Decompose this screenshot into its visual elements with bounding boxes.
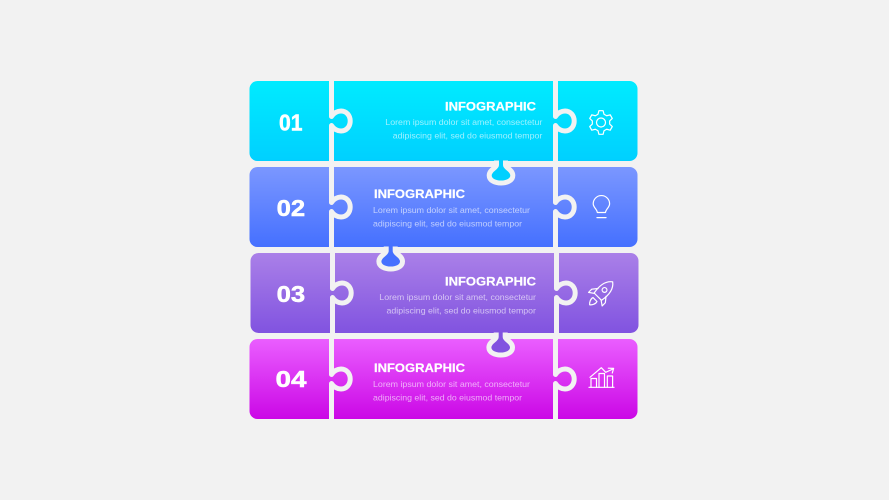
row 02 body text: adipiscing elit, sed do eiusmod tempor	[373, 218, 522, 228]
icon: rocket	[583, 275, 619, 312]
row 03 body text: adipiscing elit, sed do eiusmod tempor	[386, 306, 536, 316]
row 03 number: 03	[277, 281, 305, 307]
panel: row 02	[250, 167, 638, 269]
row 01 background	[250, 81, 638, 161]
row 02 body text	[373, 205, 530, 228]
icon: light bulb	[593, 196, 610, 218]
row 03 heading: INFOGRAPHIC	[445, 274, 536, 288]
row 02 background	[250, 167, 638, 247]
row 01 puzzle tab into row 02	[489, 160, 513, 183]
row 04 body text	[373, 379, 530, 402]
row 03 body text: Lorem ipsum dolor sit amet, consectetur	[379, 292, 536, 302]
row 02 puzzle tab into row 03	[379, 246, 402, 269]
row 02 number: 02	[277, 195, 305, 221]
row 01 left puzzle seam	[332, 81, 350, 161]
row 04 body text: Lorem ipsum dolor sit amet, consectetur	[373, 379, 530, 389]
row 03 right puzzle seam	[556, 253, 575, 333]
panel: row 04	[250, 339, 638, 419]
row 03 background	[250, 253, 638, 333]
row 01 body text: adipiscing elit, sed do eiusmod tempor	[393, 130, 542, 140]
row 01 right puzzle seam	[556, 81, 574, 161]
panel: row 03	[250, 253, 638, 355]
row 02 left puzzle seam	[332, 167, 350, 247]
row 01 body text	[385, 117, 542, 140]
row 03 puzzle tab into row 04	[489, 332, 512, 355]
row 04 heading: INFOGRAPHIC	[374, 361, 465, 375]
row 03 left puzzle seam	[332, 253, 351, 333]
row 01 number: 01	[279, 110, 302, 136]
icon: gear	[590, 111, 612, 134]
row 02 right puzzle seam	[556, 167, 574, 247]
icon: bar chart with arrow	[589, 368, 614, 387]
row 04 body text: adipiscing elit, sed do eiusmod tempor	[373, 392, 522, 402]
row 03 body text	[379, 292, 536, 316]
row 02 heading: INFOGRAPHIC	[374, 187, 465, 201]
row 04 right puzzle seam	[556, 339, 574, 419]
row 04 left puzzle seam	[332, 339, 350, 419]
row 01 body text: Lorem ipsum dolor sit amet, consectetur	[385, 117, 542, 127]
row 02 body text: Lorem ipsum dolor sit amet, consectetur	[373, 205, 530, 215]
row 04 background	[250, 339, 638, 419]
row 01 heading: INFOGRAPHIC	[445, 99, 536, 113]
panel: row 01	[250, 81, 638, 183]
row 04 number: 04	[276, 366, 306, 392]
